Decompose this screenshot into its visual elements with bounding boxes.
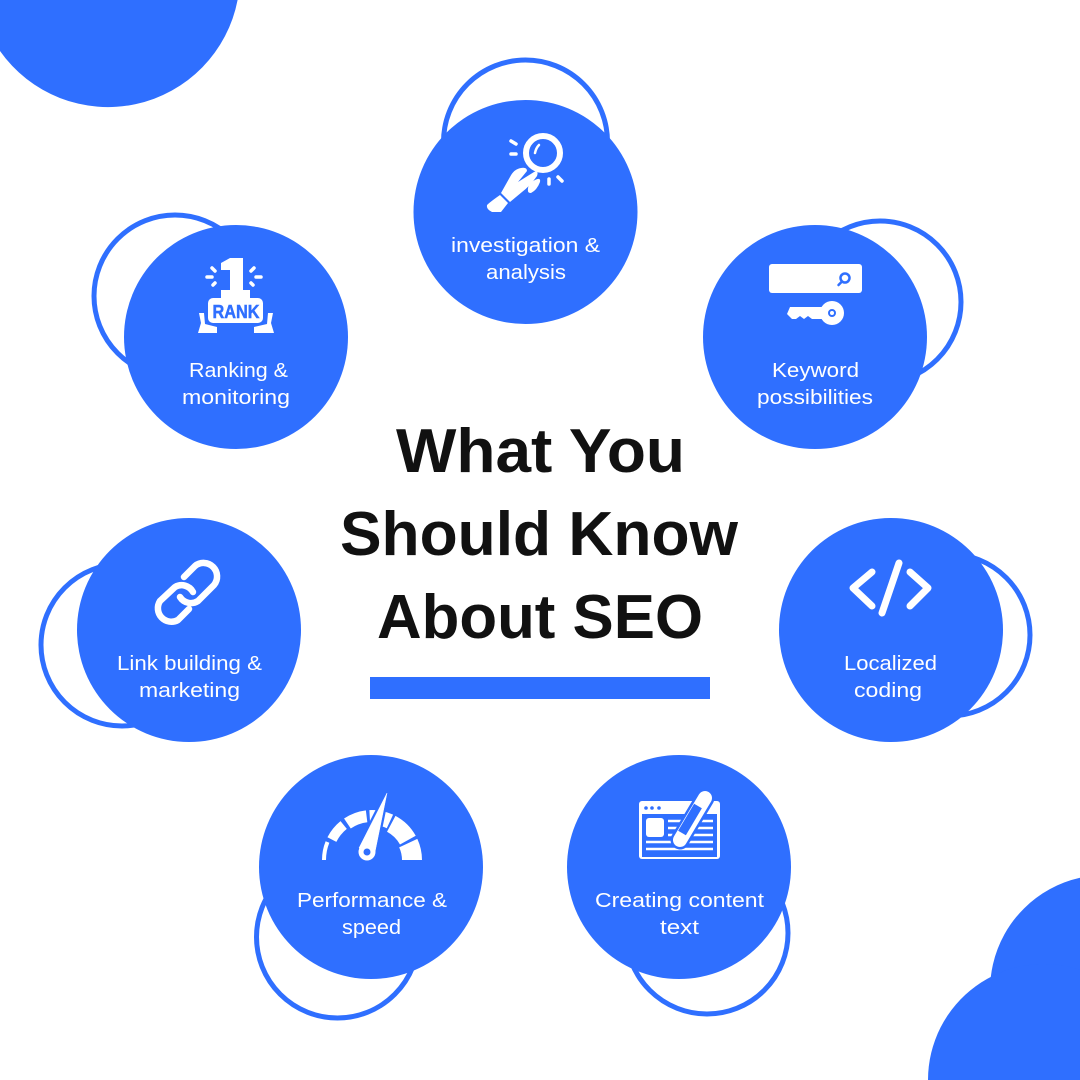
icon: rank one badge <box>198 258 274 333</box>
icon: code brackets <box>853 563 928 613</box>
blue disc <box>703 225 927 449</box>
decorative corner: bottom right <box>928 878 1080 1080</box>
blue disc <box>259 755 483 979</box>
label: coding <box>854 680 922 702</box>
label: Link building & <box>117 653 263 675</box>
label: Keyword <box>772 360 859 382</box>
outline ring <box>94 215 256 377</box>
outline ring <box>256 856 418 1018</box>
label: speed <box>342 917 401 939</box>
outline ring <box>444 60 608 224</box>
panel: link building and marketing <box>41 518 301 742</box>
blue disc <box>567 755 791 979</box>
label: marketing <box>139 680 240 702</box>
label <box>451 235 601 284</box>
blue disc <box>77 518 301 742</box>
panel: localized coding <box>779 518 1030 742</box>
outline ring <box>41 564 203 726</box>
label: analysis <box>486 262 566 284</box>
blue disc <box>124 225 348 449</box>
label <box>757 360 873 409</box>
label: Creating content <box>595 890 765 912</box>
label: possibilities <box>757 387 873 409</box>
title <box>340 417 739 652</box>
panel: creating content text <box>567 755 791 1014</box>
label <box>117 653 263 702</box>
decorative corner: top left <box>0 0 238 107</box>
outline ring <box>868 554 1030 716</box>
blue disc <box>779 518 1003 742</box>
icon: rank one badge: RANK <box>212 302 260 322</box>
label: Ranking & <box>189 360 289 382</box>
icon: speedometer <box>311 793 433 921</box>
icon: search bar and key <box>769 264 862 325</box>
label: text <box>660 917 700 939</box>
title: What You <box>396 417 685 486</box>
panel: performance and speed <box>256 755 483 1018</box>
icon: chain link <box>158 563 217 622</box>
panel: ranking and monitoring <box>94 215 348 449</box>
label: investigation & <box>451 235 601 257</box>
blue disc <box>414 100 638 324</box>
title underline bar <box>370 677 710 699</box>
title: Should Know <box>340 500 739 569</box>
panel: keyword possibilities <box>703 221 961 449</box>
icon: magnifier in hand <box>487 136 562 212</box>
label: monitoring <box>182 387 290 409</box>
label <box>595 890 765 939</box>
icon: web page and pencil <box>639 798 720 859</box>
outline ring <box>626 852 788 1014</box>
label <box>297 890 448 939</box>
title: About SEO <box>377 583 703 652</box>
label: Localized <box>844 653 937 675</box>
outline ring <box>799 221 961 383</box>
label: Performance & <box>297 890 448 912</box>
label <box>182 360 290 409</box>
panel: investigation and analysis <box>414 60 638 324</box>
label <box>844 653 937 702</box>
